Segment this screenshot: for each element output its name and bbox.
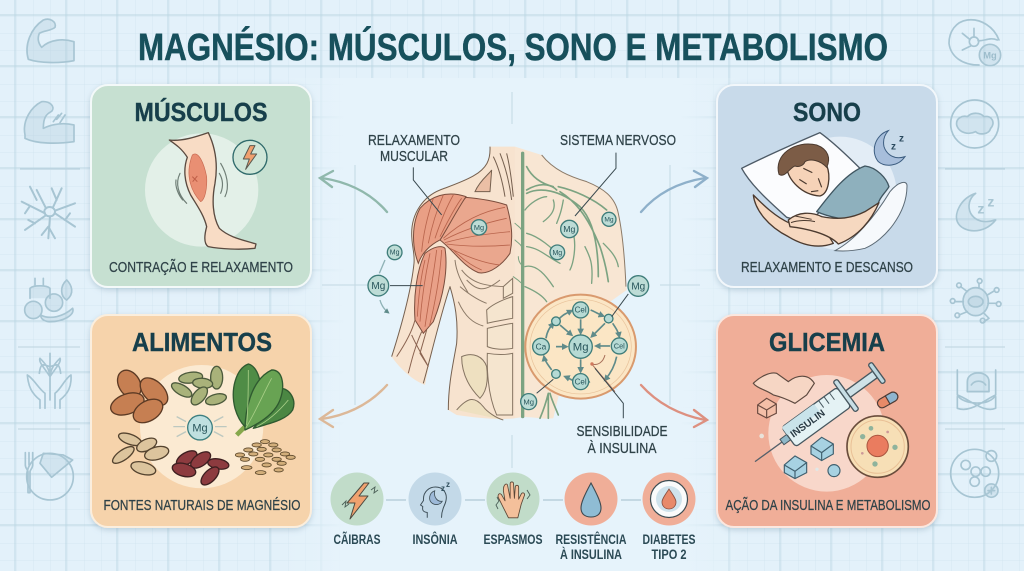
pumpkin seeds xyxy=(169,366,228,408)
label: sensibilidade à insulina: À INSULINA xyxy=(588,440,657,457)
glucose shape xyxy=(753,373,814,403)
label: sensibilidade à insulina xyxy=(576,424,668,457)
icon: crescent moon: z xyxy=(977,200,984,216)
Mg ions xyxy=(368,212,649,410)
almonds xyxy=(108,366,173,428)
pill xyxy=(876,390,900,410)
caption: relaxamento e descanso: RELAXAMENTO E DESCANSO xyxy=(741,260,913,276)
panel: alimentos xyxy=(91,315,311,527)
anatomy figure xyxy=(368,147,649,420)
spinach xyxy=(233,364,294,435)
cell xyxy=(847,416,908,477)
panel: glicemia xyxy=(717,315,937,527)
Mg ions: Mg xyxy=(552,250,562,257)
symptom: insônia: z xyxy=(441,484,445,493)
illustration: magnesium foods xyxy=(108,364,295,488)
seeds pile xyxy=(235,440,295,475)
decorative icons: right column xyxy=(949,20,1001,497)
skin right xyxy=(515,147,627,419)
label: sistema nervoso: SISTEMA NERVOSO xyxy=(560,133,676,149)
icon: magnesium cycle xyxy=(949,20,1001,66)
arrow: to alimentos xyxy=(320,385,387,427)
Mg ions: Mg xyxy=(631,281,645,292)
symptoms row xyxy=(330,472,696,562)
Mg ions: Mg xyxy=(604,217,614,224)
symptom: insônia: z xyxy=(446,480,450,489)
cell diagram xyxy=(525,295,636,399)
syringe: INSULIN xyxy=(789,408,827,440)
deltoid xyxy=(414,194,466,263)
Mg ions: Mg xyxy=(563,224,576,234)
icon: crescent moon xyxy=(956,193,996,231)
icon: cell network xyxy=(950,279,1001,323)
syringe xyxy=(744,357,890,477)
label: relaxamento muscular xyxy=(368,133,460,165)
heading: músculos: MÚSCULOS xyxy=(134,97,268,127)
icon: moon and zz xyxy=(874,131,905,165)
arrow: to músculos xyxy=(320,171,387,212)
caption: fontes naturais: FONTES NATURAIS DE MAGNÉSIO xyxy=(104,497,300,514)
pectoral xyxy=(440,197,512,273)
panel: sono xyxy=(717,85,937,287)
icon: metabolism device xyxy=(957,370,996,409)
abdominals xyxy=(487,278,513,415)
pillow xyxy=(742,133,862,219)
arrow: to sono xyxy=(641,171,707,212)
caption: ação da insulina: AÇÃO DA INSULINA E METABOLISMO xyxy=(726,497,930,514)
icon: plate, fork and clock xyxy=(25,453,73,500)
symptom: cãibras: CÃIBRAS xyxy=(334,532,380,547)
ice cubes xyxy=(784,437,840,479)
neck muscles xyxy=(475,153,513,200)
heading: glicemia: GLICEMIA xyxy=(769,327,885,357)
shirt xyxy=(817,166,889,222)
Mg ions: Mg xyxy=(371,281,385,292)
cell diagram: Cel xyxy=(575,377,587,386)
heading: sono: SONO xyxy=(793,97,861,127)
icon: magnesium cycle: Mg xyxy=(983,50,997,60)
label: relaxamento muscular: MUSCULAR xyxy=(380,149,448,165)
panel: músculos xyxy=(91,85,311,287)
ion arrows xyxy=(379,260,388,313)
hip xyxy=(457,355,503,420)
icon: arm with lightning xyxy=(24,102,74,143)
nuts xyxy=(110,430,170,477)
icon: flexed arm xyxy=(27,19,74,63)
forearm lines xyxy=(397,320,428,373)
icon: brain in circle xyxy=(951,100,999,148)
icon: lightning badge xyxy=(233,140,267,174)
symptom: cãibras xyxy=(330,472,384,547)
cell diagram: Ca xyxy=(536,341,547,351)
hair xyxy=(778,144,829,175)
magnesium badge xyxy=(173,415,227,440)
icon: neuron xyxy=(22,187,75,238)
symptom: espasmos xyxy=(484,472,542,547)
biceps xyxy=(415,247,446,333)
illustration: leg with cramp xyxy=(145,133,267,249)
symptom: diabetes tipo 2 xyxy=(642,472,696,562)
back arm xyxy=(753,195,833,246)
title: MAGNÉSIO: MÚSCULOS, SONO E METABOLISMO xyxy=(138,25,888,69)
symptom: resistência à insulina: À INSULINA xyxy=(560,547,622,562)
muscle fibres xyxy=(417,195,510,327)
icon: food group xyxy=(25,278,73,322)
nerve tree xyxy=(513,153,618,418)
heading: alimentos: ALIMENTOS xyxy=(132,327,272,357)
caption: contração e relaxamento: CONTRAÇÃO E RELAXAMENTO xyxy=(109,259,293,276)
symptom: insônia: INSÔNIA xyxy=(412,532,458,547)
cell diagram: Cel xyxy=(575,306,587,315)
cell diagram: Mg xyxy=(573,342,589,354)
face xyxy=(787,158,829,196)
blanket xyxy=(835,182,907,251)
leader lines xyxy=(390,153,628,418)
sugar cube red xyxy=(758,398,776,418)
symptom: resistência à insulina: RESISTÊNCIA xyxy=(556,532,627,547)
symptom: diabetes tipo 2: DIABETES xyxy=(642,532,696,547)
cell diagram: Cel xyxy=(614,342,625,351)
magnesium badge: Mg xyxy=(192,422,208,434)
symptom: resistência à insulina xyxy=(556,472,627,562)
icon: moon and zz: z xyxy=(891,141,896,152)
kidney beans xyxy=(171,448,230,488)
skin left xyxy=(392,147,515,419)
symptom: diabetes tipo 2: TIPO 2 xyxy=(652,547,686,562)
illustration: sleeping man xyxy=(742,131,907,251)
label: sensibilidade à insulina: SENSIBILIDADE xyxy=(576,424,668,440)
label: relaxamento muscular: RELAXAMENTO xyxy=(368,133,460,149)
Mg ions: Mg xyxy=(474,223,484,232)
symptom: insônia xyxy=(408,472,462,547)
arrow: to glicemia xyxy=(641,385,707,427)
front arm xyxy=(788,203,879,244)
icon: moon and zz: z xyxy=(899,134,904,145)
icon: molecule circle xyxy=(951,449,999,497)
decorative icons: left column xyxy=(22,19,75,500)
icon: crescent moon: z xyxy=(987,194,994,210)
armpit and ribs xyxy=(455,260,510,326)
icon: hands and wheat xyxy=(27,353,71,408)
Mg ions: Mg xyxy=(390,250,400,257)
illustration: insulin syringe and cell xyxy=(744,357,908,492)
symptom: espasmos: ESPASMOS xyxy=(484,532,542,547)
Mg ions: Mg xyxy=(523,397,534,406)
